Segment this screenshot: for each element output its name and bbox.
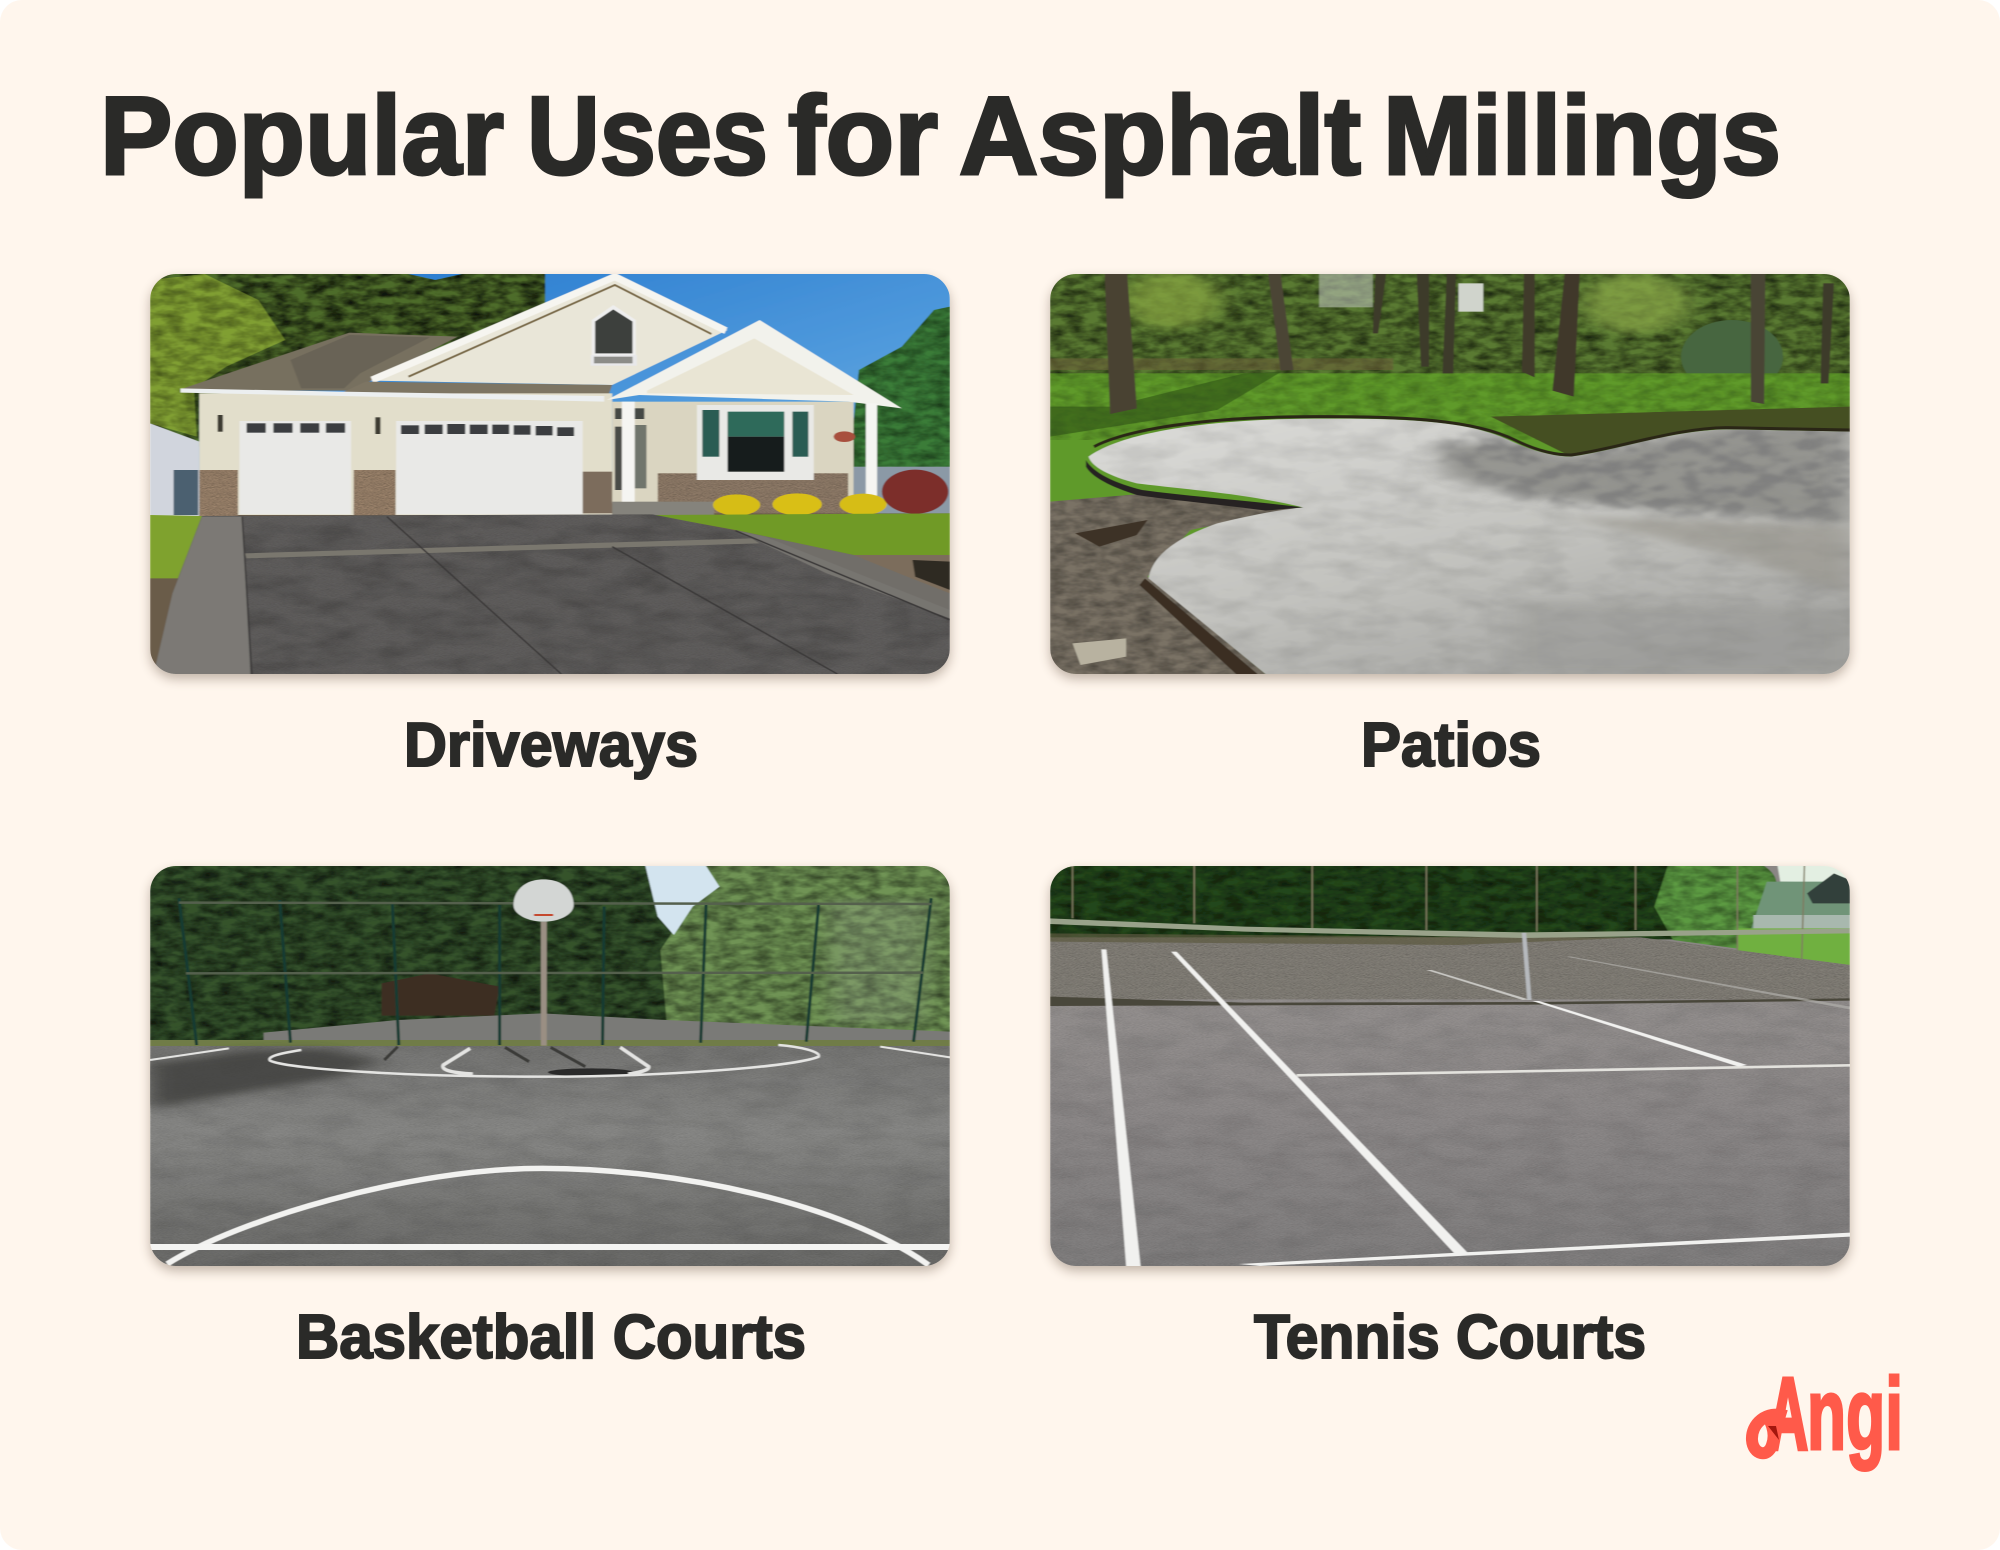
attic window: [592, 305, 636, 355]
main court: [150, 1046, 950, 1266]
upper gable: [371, 274, 727, 385]
net top band and foot: [1050, 918, 1850, 938]
driveway surface: [154, 514, 950, 674]
hanging basket: [834, 431, 855, 442]
distant sky and yard: [1778, 866, 1850, 883]
title: Millings: [1383, 74, 1781, 198]
porch: [612, 402, 853, 503]
title: Asphalt: [959, 74, 1361, 198]
far court lines: [150, 1045, 950, 1077]
panel: tennis courts photo: [1050, 866, 1850, 1266]
hip roof: [183, 333, 458, 391]
panel: patios photo: [1050, 274, 1850, 674]
net post: [1522, 933, 1532, 1000]
background trees: [1050, 274, 1850, 374]
panel: basketball courts photo: [150, 866, 950, 1266]
fence posts: [1073, 866, 1804, 958]
panel: driveways photo: [150, 274, 950, 674]
lawn shade: [1050, 373, 1850, 440]
columns: [622, 402, 635, 502]
mid roof: [344, 382, 612, 400]
concrete slab: [1089, 419, 1850, 674]
background trees: [1050, 866, 1693, 939]
trees: [150, 866, 718, 1043]
label: tennis courts: Tennis Courts: [1254, 1303, 1646, 1372]
title: [100, 74, 1781, 199]
tree shadow: [150, 1048, 376, 1107]
title: Popular: [100, 74, 504, 198]
shed: [382, 973, 500, 1016]
base lawn: [1050, 274, 1850, 674]
porch gable: [607, 320, 902, 408]
left tree line: [150, 274, 545, 447]
net mesh: [1050, 937, 1850, 999]
garage door: double: [396, 421, 583, 514]
court lines: [1101, 949, 1141, 1266]
porch steps: [612, 502, 714, 516]
back court: [264, 1013, 950, 1043]
logo: Angi: A: [1768, 1357, 1808, 1471]
far bank: [1050, 358, 1393, 370]
sky gap: [645, 866, 719, 935]
house body: [199, 393, 612, 515]
right tree: [848, 307, 950, 473]
title: for: [788, 74, 938, 198]
label: driveways: Driveways: [404, 711, 698, 780]
neighbor and fence: [150, 423, 199, 517]
court: [1050, 938, 1850, 1266]
house in the distance: [1319, 274, 1373, 307]
fence: [179, 898, 931, 1045]
shrubs: [713, 494, 760, 516]
label: patios: Patios: [1361, 711, 1541, 780]
dirt: [1050, 493, 1298, 674]
pole and backboard: [541, 922, 547, 1046]
lawns: [652, 513, 950, 555]
label: basketball courts: Basketball Courts: [296, 1303, 806, 1372]
near court lines: [167, 1168, 929, 1265]
garage door: single: [240, 421, 351, 514]
slab forms: [1086, 460, 1303, 511]
stone columns: [199, 470, 238, 516]
tree trunks: [1105, 274, 1137, 414]
title: Uses: [527, 74, 768, 198]
wall lamps: [218, 415, 223, 432]
logo: Angi: ngi: [1807, 1357, 1903, 1471]
